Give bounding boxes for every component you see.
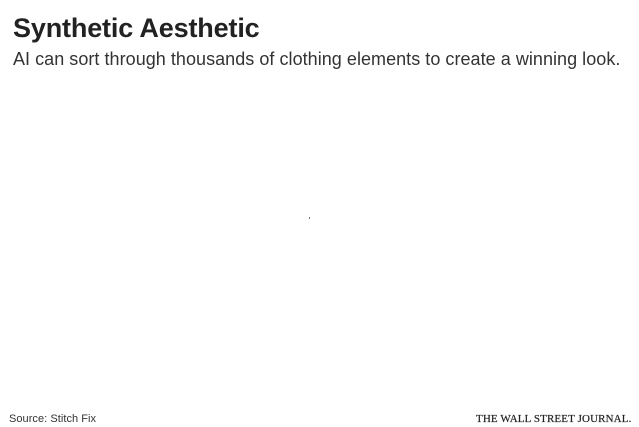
center dot	[309, 217, 310, 219]
source note: Source: Stitch Fix	[9, 413, 96, 425]
publisher credit: THE WALL STREET JOURNAL.	[476, 413, 631, 425]
title: Synthetic Aesthetic	[13, 13, 260, 43]
subtitle: AI can sort through thousands of clothing elements to create a winning look.	[13, 49, 620, 69]
